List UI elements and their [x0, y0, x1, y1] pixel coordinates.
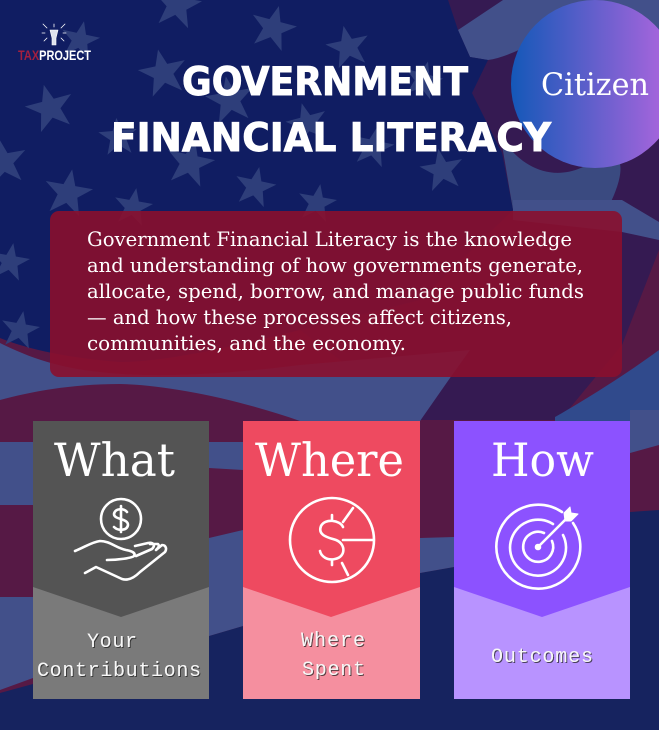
definition text: and understanding of how governments generate,	[87, 254, 583, 277]
panel: Where	[243, 421, 420, 699]
label: Outcomes: Outcomes	[491, 646, 593, 669]
heading: What: What	[54, 433, 175, 487]
panel: How	[454, 421, 630, 699]
panel: definition	[50, 211, 622, 377]
label: Where Spent: Spent	[302, 659, 365, 682]
title: FINANCIAL LITERACY	[111, 116, 552, 161]
title: GOVERNMENT	[182, 60, 468, 105]
label: Where Spent	[301, 630, 365, 682]
definition text: — and how these processes affect citizens,	[87, 306, 512, 329]
definition text: allocate, spend, borrow, and manage public funds	[87, 280, 584, 303]
icon: hand holding coin	[75, 499, 166, 580]
circle badge: Citizen	[511, 0, 659, 168]
logo wordmark: TAXPROJECT	[18, 47, 91, 63]
flag field: maroon lower	[0, 200, 659, 693]
definition text	[87, 228, 584, 355]
icon: target with arrow	[496, 505, 580, 589]
label: Your Contributions	[37, 631, 201, 683]
heading: How: How	[491, 433, 594, 487]
heading: Where: Where	[255, 433, 404, 487]
icon: torch with rays	[42, 24, 66, 45]
panel: What	[33, 421, 209, 699]
title	[111, 60, 552, 161]
icon: dollar pie chart	[290, 498, 374, 582]
definition text: Government Financial Literacy is the knowledge	[87, 228, 572, 251]
definition text: communities, and the economy.	[87, 332, 406, 355]
circle badge: Citizen: Citizen	[541, 67, 649, 103]
label: Your Contributions: Contributions	[37, 660, 201, 683]
label: Your Contributions: Your	[87, 631, 137, 654]
flag field: purple upper right	[300, 0, 659, 420]
canton: navy field with stars	[0, 0, 513, 362]
label: Where Spent: Where	[301, 630, 365, 653]
logo: Tax Project	[18, 24, 91, 63]
